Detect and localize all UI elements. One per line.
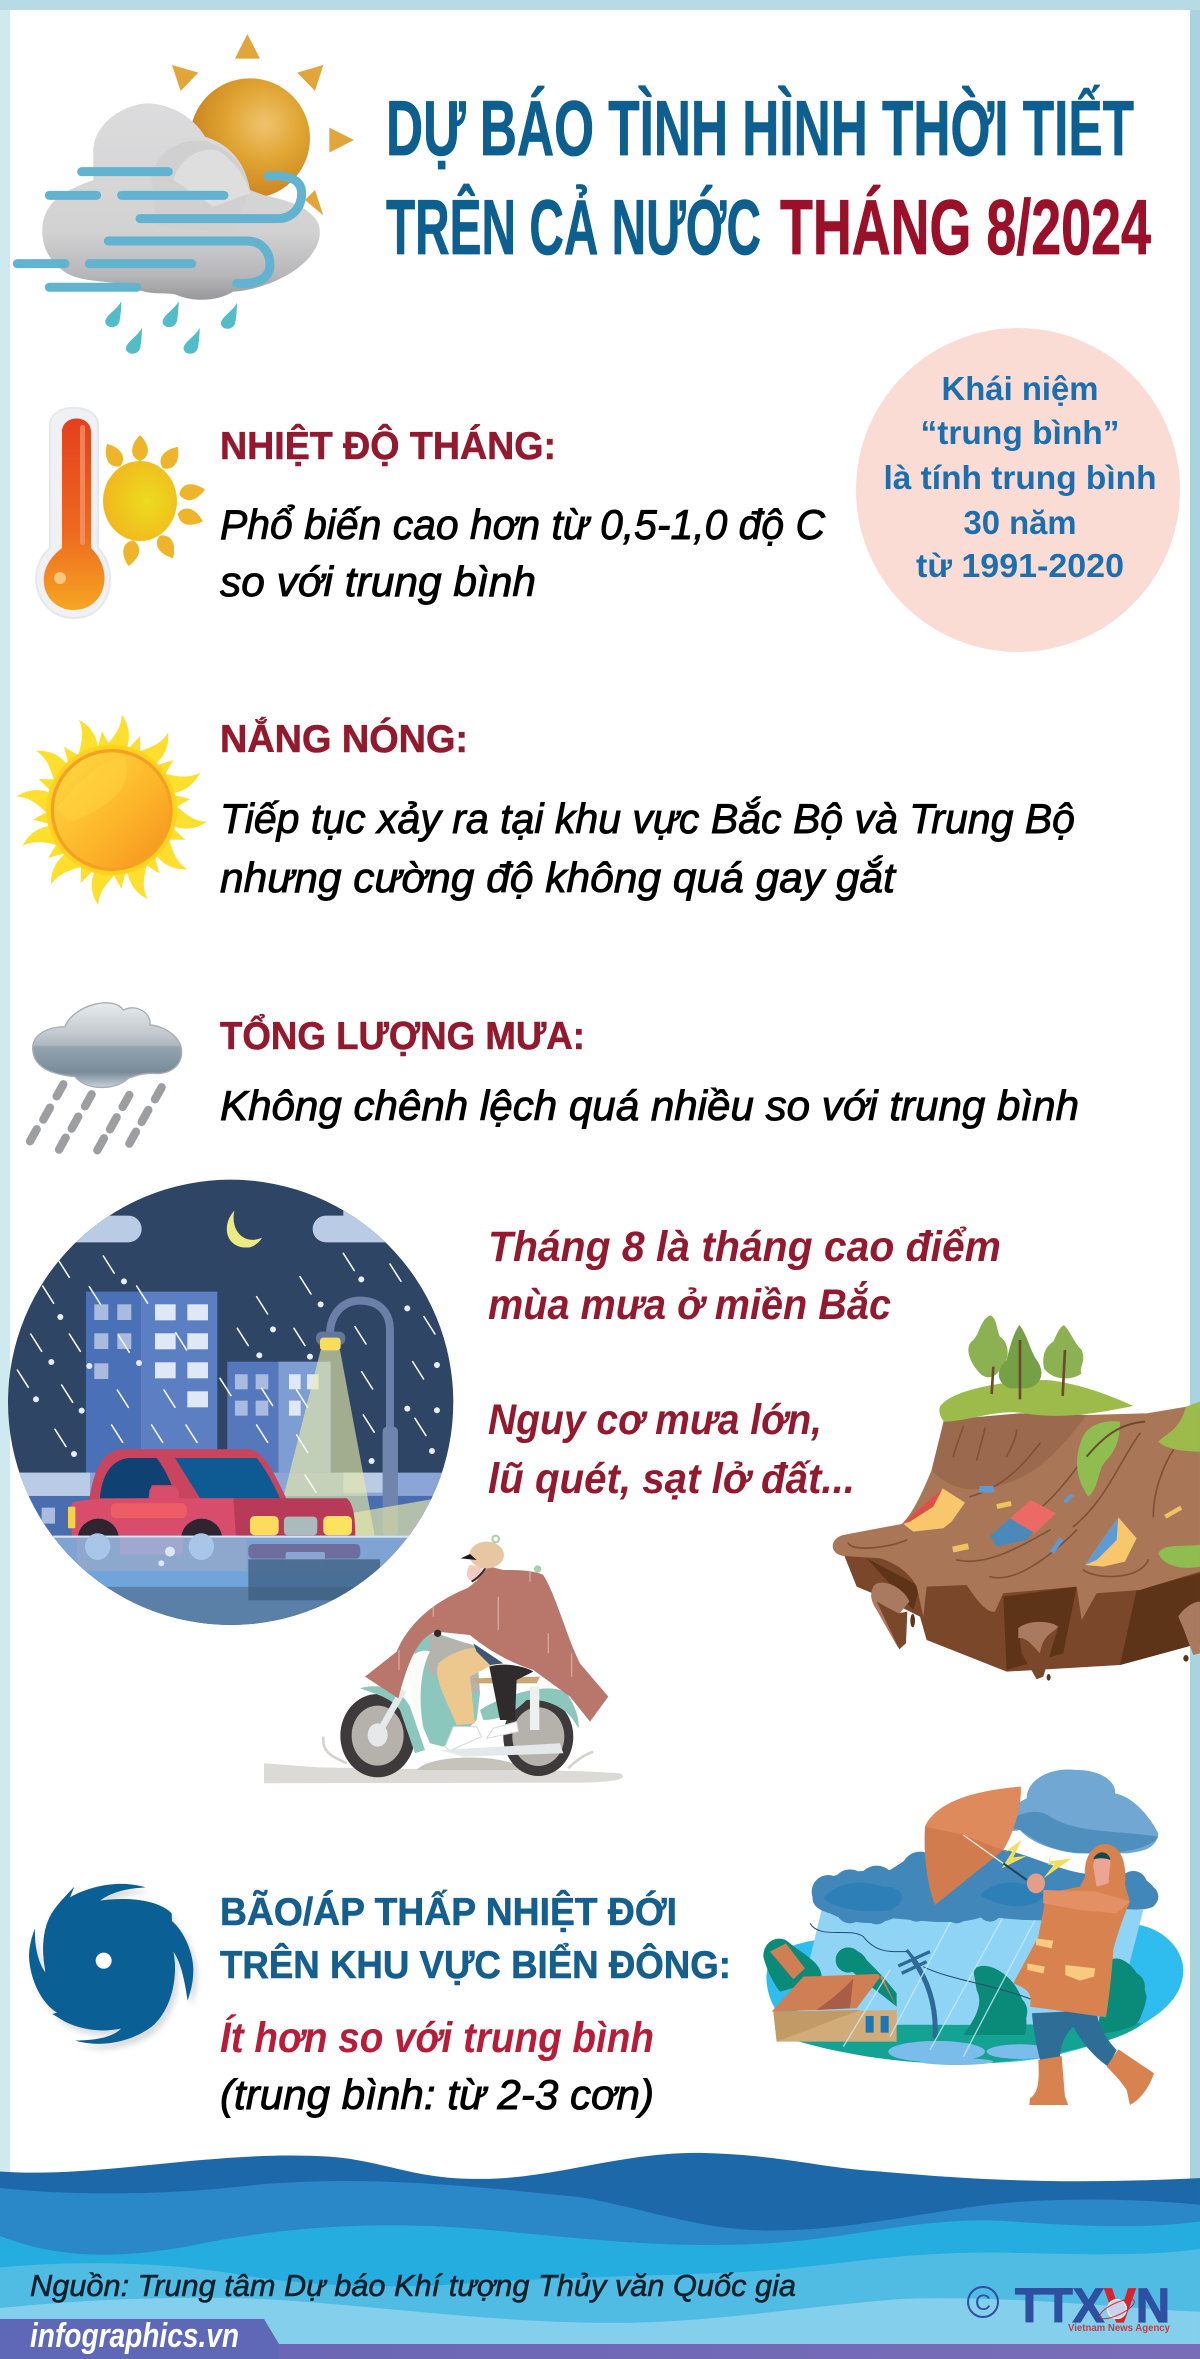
section: tropical storms: BÃO/ÁP THẤP NHIỆT ĐỚI xyxy=(220,1890,677,1934)
section: heat waves xyxy=(220,717,1075,901)
callout: definition of average: 30 năm xyxy=(964,504,1076,541)
section: total rainfall xyxy=(220,1013,1079,1129)
illustration: landslide xyxy=(833,1315,1200,1681)
section: tropical storms xyxy=(220,1890,731,2118)
section: monthly temperature xyxy=(220,423,826,605)
section: tropical storms: TRÊN KHU VỰC BIỂN ĐÔNG: xyxy=(220,1942,731,1987)
section: heat waves: Tiếp tục xảy ra tại khu vực Bắc Bộ và Trung Bộ xyxy=(220,795,1075,842)
logo: TTXVN Vietnam News Agency: C xyxy=(975,2290,991,2315)
text: August peak rainy season warning xyxy=(488,1223,1001,1503)
text: August peak rainy season warning: Nguy cơ mưa lớn, xyxy=(488,1396,822,1444)
section: heat waves: nhưng cường độ không quá gay gắt xyxy=(220,854,897,901)
section: heat waves: NẮNG NÓNG: xyxy=(220,717,468,761)
section: total rainfall: Không chênh lệch quá nhiều so với trung bình xyxy=(220,1082,1079,1129)
section: tropical storms: (trung bình: từ 2-3 cơn) xyxy=(220,2071,654,2118)
section: total rainfall: TỔNG LƯỢNG MƯA: xyxy=(220,1013,585,1058)
section: monthly temperature: NHIỆT ĐỘ THÁNG: xyxy=(220,423,556,468)
icon: thermometer and sun xyxy=(36,408,206,618)
footer strip xyxy=(0,2319,1200,2359)
section: monthly temperature: so với trung bình xyxy=(220,558,536,605)
section: monthly temperature: Phổ biến cao hơn từ 0,5-1,0 độ C xyxy=(220,501,826,548)
section: tropical storms: Ít hơn so với trung bình xyxy=(220,2014,654,2062)
illustration: person with umbrella in storm xyxy=(763,1769,1183,2105)
icon: rain cloud xyxy=(30,1003,182,1150)
callout: definition of average: là tính trung bình xyxy=(884,459,1156,496)
callout: definition of average: từ 1991-2020 xyxy=(916,547,1124,584)
callout: definition of average: Khái niệm xyxy=(942,370,1098,407)
text: August peak rainy season warning: mùa mưa ở miền Bắc xyxy=(488,1280,891,1329)
text: August peak rainy season warning: Tháng 8 là tháng cao điểm xyxy=(488,1223,1001,1271)
website label: infographics.vn xyxy=(30,2317,239,2355)
icon: tropical storm xyxy=(29,1884,197,2049)
illustration: motorbike rider in raincoat xyxy=(264,1536,623,1783)
title: TRÊN CẢ NƯỚC xyxy=(386,183,761,271)
title xyxy=(386,84,1151,271)
illustration: night rain city with car xyxy=(0,1170,467,1637)
icon: blazing sun xyxy=(15,713,209,907)
callout: definition of average xyxy=(856,328,1180,652)
logo: TTXVN Vietnam News Agency: Vietnam News Agency xyxy=(1068,2323,1170,2334)
waves: sea footer background xyxy=(0,2153,1200,2359)
logo: TTXVN Vietnam News Agency: TTXVN xyxy=(1015,2280,1170,2333)
text: August peak rainy season warning: lũ quét, sạt lở đất... xyxy=(488,1455,855,1503)
icon: sun behind cloud with wind and rain xyxy=(17,34,354,354)
source line: Nguồn: Trung tâm Dự báo Khí tượng Thủy văn Quốc gia xyxy=(30,2268,796,2303)
callout: definition of average: “trung bình” xyxy=(920,414,1120,451)
